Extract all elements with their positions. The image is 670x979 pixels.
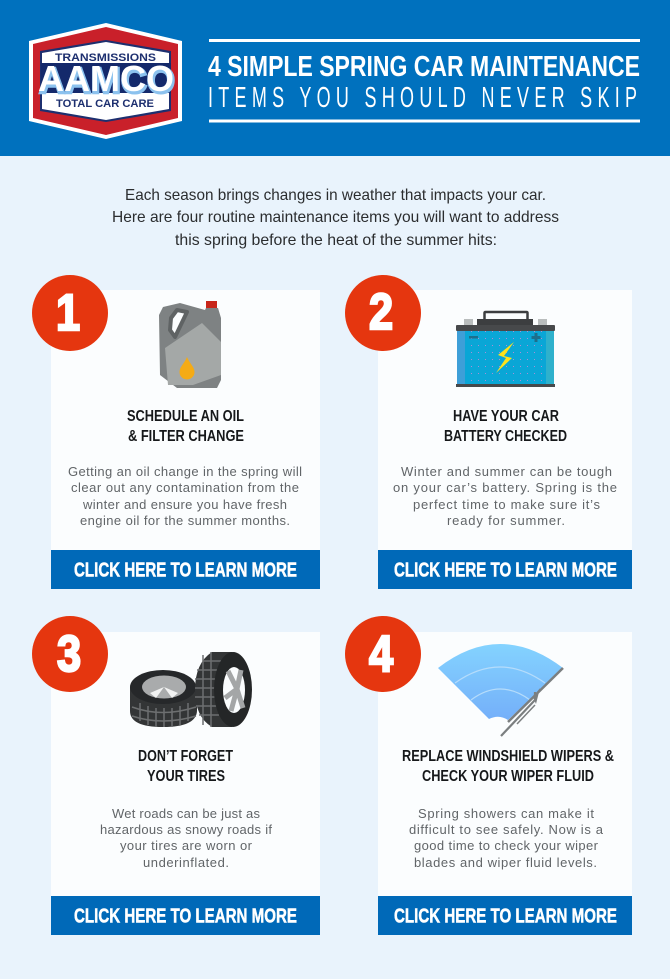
card body text: Wet roads can be just as [112,806,260,821]
number badge 4: 4 [369,626,394,683]
number badge 3: 3 [57,626,81,683]
card heading [444,408,567,445]
number badge 3 [32,616,108,692]
button [51,896,320,935]
card body text: Winter and summer can be tough [401,464,612,479]
card body text: winter and ensure you have fresh [82,497,287,512]
icon: oil jug [159,301,221,388]
icon: battery [456,312,555,387]
card body text: ready for summer. [447,513,565,528]
card body text: engine oil for the summer months. [80,513,290,528]
card body text: clear out any contamination from the [71,480,299,495]
logo: AAMCO: TRANSMISSIONS [55,52,156,64]
intro text: this spring before the heat of the summer hits: [175,232,497,249]
panel: tires [32,616,320,935]
card body text [68,464,302,528]
button [378,896,632,935]
button: CLICK HERE TO LEARN MORE [74,560,297,582]
card heading: BATTERY CHECKED [444,428,567,445]
card body text: underinflated. [143,855,229,870]
card heading: REPLACE WINDSHIELD WIPERS & [402,748,614,765]
number badge 4 [345,616,421,692]
card heading: & FILTER CHANGE [128,428,244,445]
panel: oil change [32,275,320,589]
number badge 1: 1 [56,285,80,342]
card body text [100,806,272,870]
card heading: CHECK YOUR WIPER FLUID [422,768,594,785]
icon: windshield wiper [438,644,563,736]
logo: AAMCO [29,23,182,139]
card heading: HAVE YOUR CAR [453,408,559,425]
card body text: perfect time to make sure it’s [413,497,600,512]
card heading [127,408,244,445]
card body text: Spring showers can make it [418,806,594,821]
logo: AAMCO: AAMCO [39,60,175,101]
header banner [0,0,670,156]
intro text: Each season brings changes in weather that impacts your car. [125,187,546,204]
card body text [409,806,604,870]
logo: AAMCO: AAMCO [38,58,174,99]
button [378,550,632,589]
card body text: your tires are worn or [120,838,253,853]
card heading: YOUR TIRES [147,768,225,785]
intro text [112,187,559,249]
button [51,550,320,589]
card body text: good time to check your wiper [414,838,599,853]
card heading [138,748,233,785]
button: CLICK HERE TO LEARN MORE [74,906,297,928]
logo: AAMCO: TOTAL CAR CARE [56,98,154,110]
card body text [393,464,617,528]
panel: wipers [345,616,632,935]
title [208,51,640,114]
card body text: on your car’s battery. Spring is the [393,480,617,495]
panel: battery [345,275,632,589]
title: ITEMS YOU SHOULD NEVER SKIP [208,82,637,114]
card body text: Getting an oil change in the spring will [68,464,302,479]
number badge 2 [345,275,421,351]
card body text: difficult to see safely. Now is a [409,822,604,837]
intro text: Here are four routine maintenance items you will want to address [112,209,559,226]
card body text: hazardous as snowy roads if [100,822,272,837]
card heading: DON’T FORGET [138,748,233,765]
card heading: SCHEDULE AN OIL [127,408,244,425]
number badge 1 [32,275,108,351]
number badge 2: 2 [369,284,393,341]
card body text: blades and wiper fluid levels. [414,855,597,870]
card heading [402,748,614,785]
icon: tires [130,652,252,727]
